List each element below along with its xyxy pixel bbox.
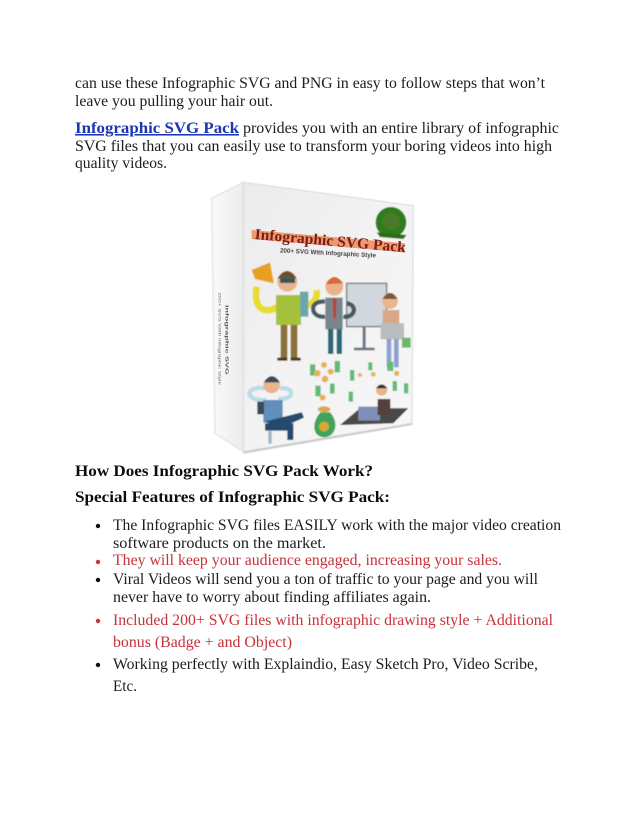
figure: man with megaphone xyxy=(252,262,317,361)
bullet 1: The Infographic SVG files EASILY work with the major video creation xyxy=(113,517,561,534)
heading: special features: Special Features of Infographic SVG Pack: xyxy=(75,489,390,506)
bullet 3 xyxy=(96,571,538,606)
badge: best wreath xyxy=(376,207,407,239)
bullet 3: Viral Videos will send you a ton of traffic to your page and you will xyxy=(113,571,538,588)
box side label xyxy=(218,292,229,386)
figure: man with laptop xyxy=(381,293,411,367)
bullet list: features xyxy=(96,517,561,695)
text block: product description with link: Infographic SVG Pack xyxy=(75,120,239,137)
bullet 2: They will keep your audience engaged, increasing your sales. xyxy=(113,552,502,569)
bullet 3: never have to worry about finding affiliates again. xyxy=(113,589,431,606)
bullet 4: Included 200+ SVG files with infographic drawing style + Additional xyxy=(113,612,553,629)
box subtitle: 200+ SVG With Infographic Style xyxy=(280,248,377,259)
bullet 4: bonus (Badge + and Object) xyxy=(113,634,292,651)
text block: intro paragraph xyxy=(75,75,546,110)
figure: man at laptop with cash xyxy=(340,362,408,425)
figure: relaxing man on chair xyxy=(250,376,304,444)
bullet 4 xyxy=(96,612,553,651)
text block: intro paragraph: leave you pulling your hair out. xyxy=(75,93,273,110)
bullet 5 xyxy=(96,656,538,695)
text block: product description with link: quality videos. xyxy=(75,155,167,172)
figure: presenter at board xyxy=(313,277,387,354)
bullet 5: Etc. xyxy=(113,678,137,695)
box side label: Infographic SVG xyxy=(223,305,229,375)
bullet 1: software products on the market. xyxy=(113,535,326,552)
box title banner: Infographic SVG Pack xyxy=(254,226,407,256)
text block: intro paragraph: can use these Infographic SVG and PNG in easy to follow steps that won’t xyxy=(75,75,546,92)
text block: product description with link: provides you with an entire library of infographic xyxy=(243,120,559,137)
product box image xyxy=(212,182,413,454)
bullet 5: Working perfectly with Explaindio, Easy Sketch Pro, Video Scribe, xyxy=(113,656,538,673)
box side label: 200+ SVG With Infographic Style xyxy=(218,292,223,386)
heading: how does it work: How Does Infographic SVG Pack Work? xyxy=(75,463,373,480)
icon: money bag with cash xyxy=(310,361,340,437)
text block: product description with link: SVG files that you can easily use to transform your boring videos into high xyxy=(75,138,552,155)
box side and front faces xyxy=(212,182,413,454)
bullet 1 xyxy=(96,517,561,552)
text block: product description with link xyxy=(75,120,559,172)
